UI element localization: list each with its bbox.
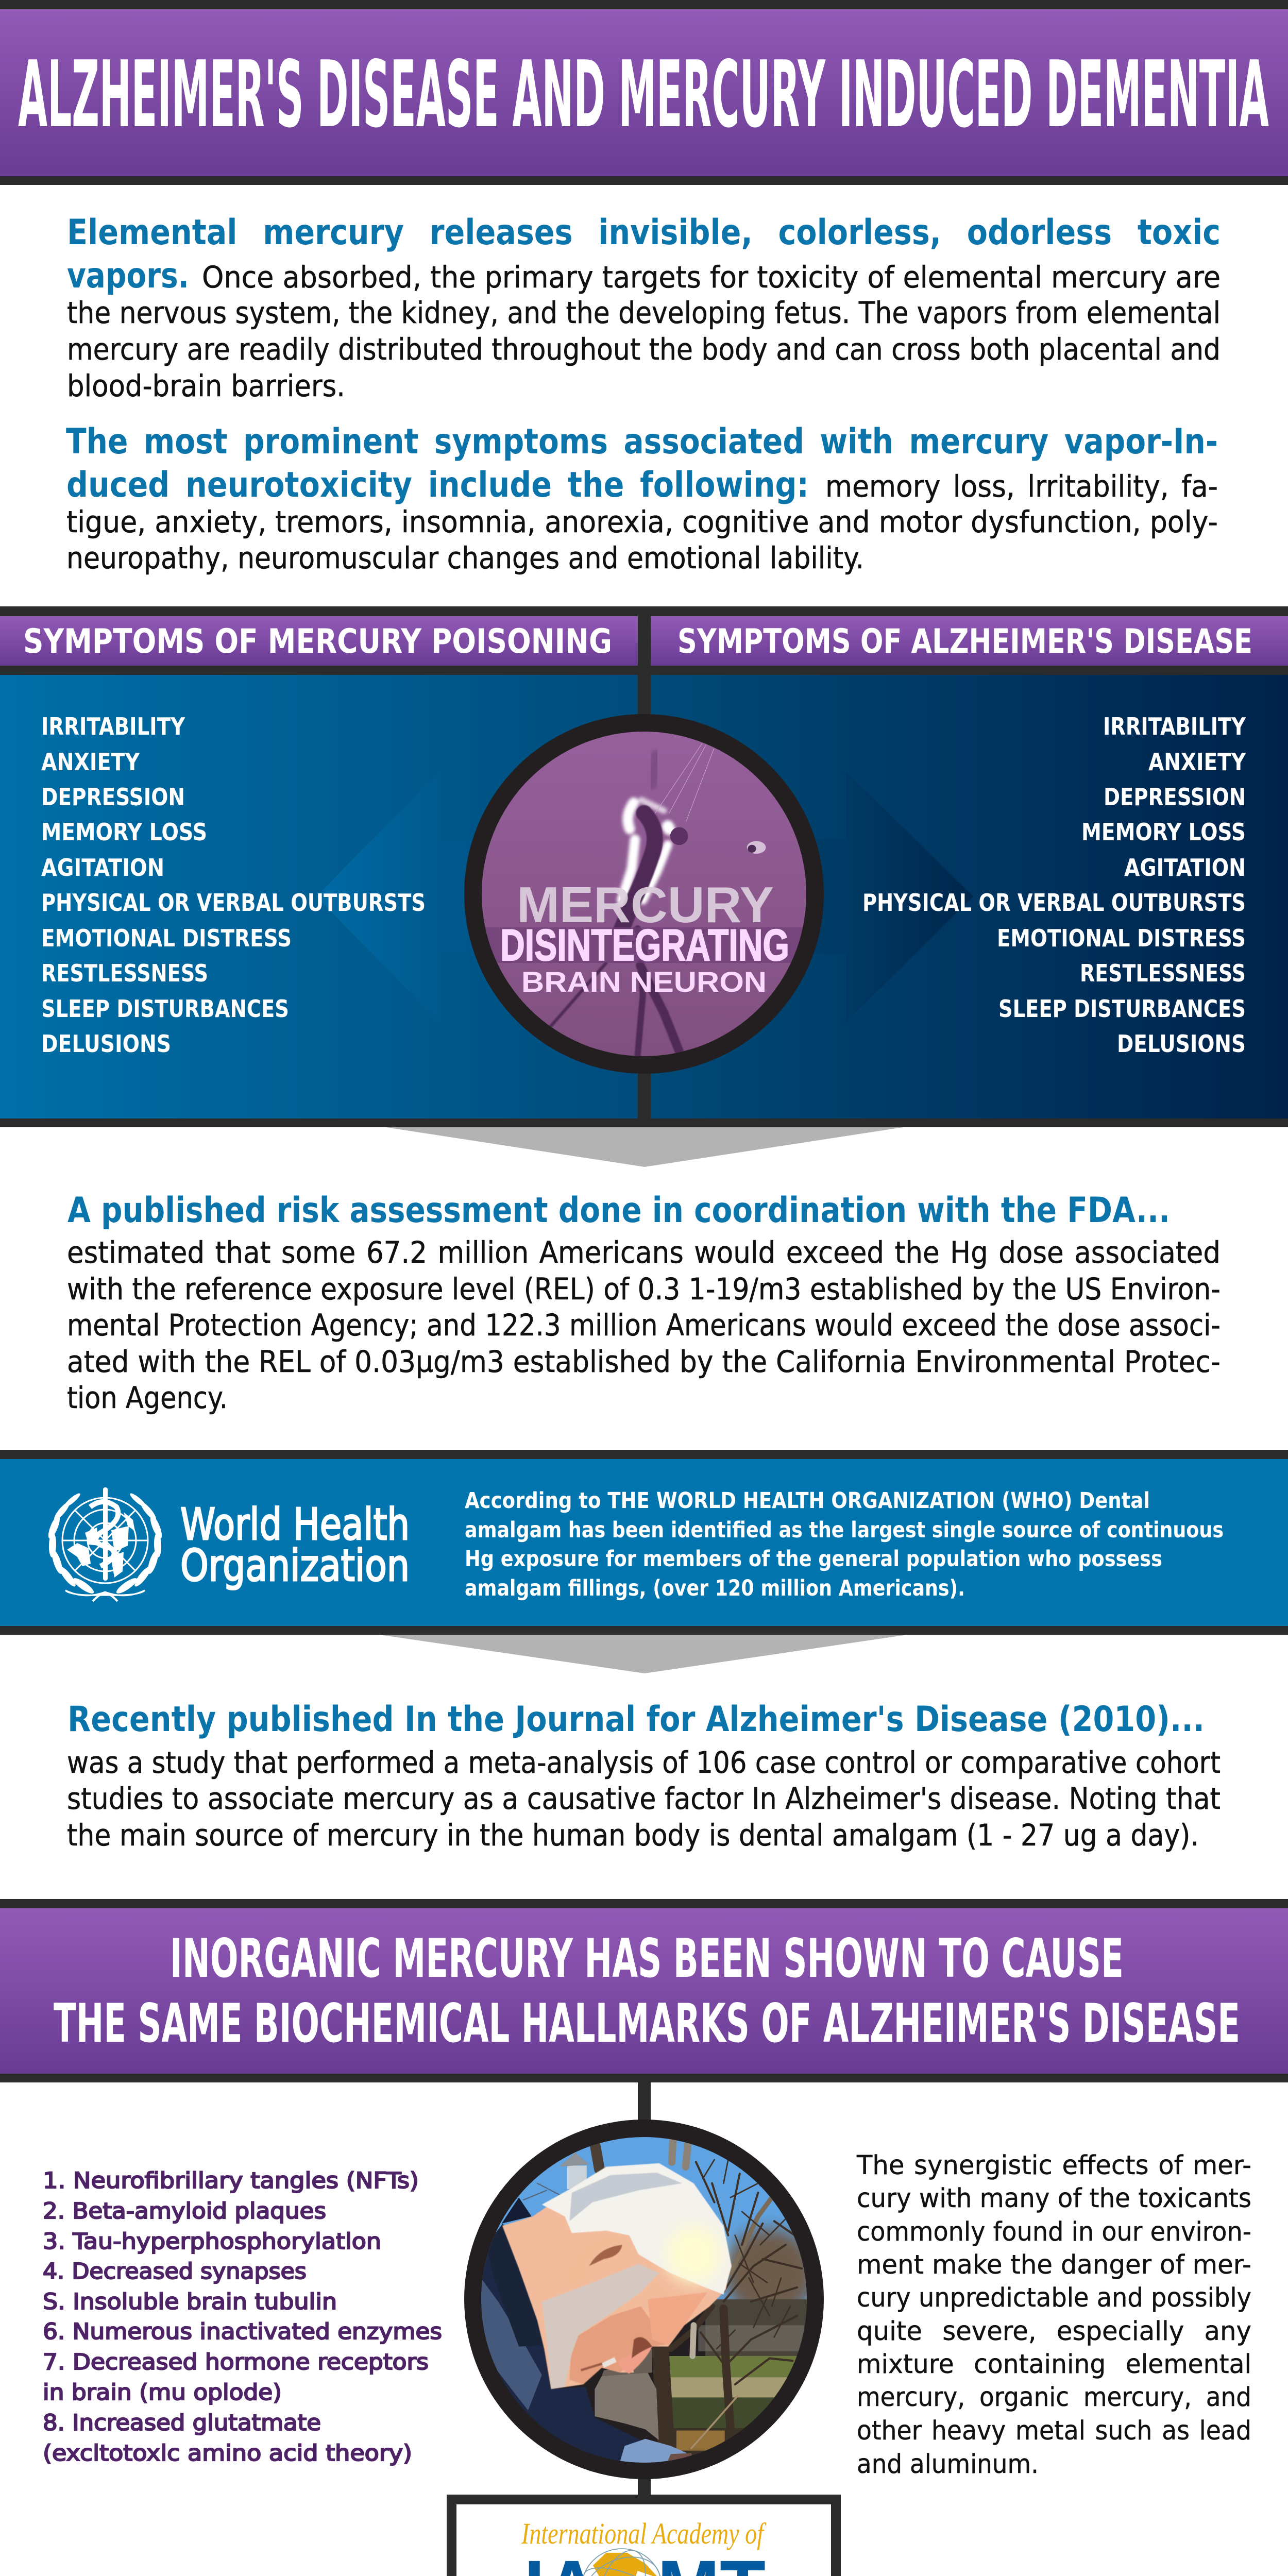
list: alzheimer's symptoms: ANXIETY — [1148, 748, 1246, 776]
WHO statement: According to THE WORLD HEALTH ORGANIZATION (WHO) Dental — [465, 1488, 1150, 1514]
list: biochemical hallmarks: 3. Tau-hyperphosphorylatlon — [43, 2229, 381, 2255]
intro text block: prominent symptoms: duced neurotoxicity include the following: — [66, 465, 809, 505]
text block: synergistic effects — [856, 2150, 1251, 2480]
WHO statement: amalgam fillings, (over 120 million Americans). — [465, 1575, 965, 1601]
WHO wordmark: World Health — [180, 1499, 410, 1550]
list: biochemical hallmarks: 1. Neurofibrillary tangles (NFTs) — [43, 2168, 419, 2194]
intro text block: elemental mercury — [67, 212, 1221, 403]
intro text block: elemental mercury: vapors. — [67, 256, 189, 296]
intro text block: prominent symptoms: tigue, anxiety, tremors, insomnia, anorexia, cognitive and motor dysfunction, poly- — [66, 504, 1218, 539]
list: biochemical hallmarks: S. Insoluble brain tubulin — [43, 2289, 337, 2315]
list: mercury poisoning symptoms: DEPRESSION — [41, 783, 185, 811]
icon: brain neuron circle — [464, 714, 824, 1074]
text block: synergistic effects: mercury, organic mercury, and — [857, 2382, 1251, 2413]
list: biochemical hallmarks — [43, 2168, 442, 2466]
list: biochemical hallmarks: (excltotoxlc amino acid theory) — [43, 2441, 412, 2466]
WHO statement: Hg exposure for members of the general population who possess — [465, 1546, 1162, 1572]
label: mercury: MERCURY — [517, 876, 774, 933]
list: mercury poisoning symptoms: MEMORY LOSS — [41, 818, 207, 846]
list: mercury poisoning symptoms: IRRITABILITY — [41, 713, 185, 740]
text block: synergistic effects: mixture containing elemental — [857, 2349, 1251, 2380]
icon: portrait circle — [464, 2120, 824, 2479]
intro text block: prominent symptoms: memory loss, lrritability, fa- — [825, 469, 1218, 504]
text block: synergistic effects: The synergistic effects of mer- — [856, 2150, 1251, 2181]
list: biochemical hallmarks: 2. Beta-amyloid plaques — [43, 2198, 326, 2224]
list: mercury poisoning symptoms: EMOTIONAL DISTRESS — [41, 924, 292, 952]
list: alzheimer's symptoms: IRRITABILITY — [1103, 713, 1246, 740]
list: mercury poisoning symptoms: AGITATION — [41, 854, 164, 882]
list: mercury poisoning symptoms: SLEEP DISTURBANCES — [41, 995, 289, 1023]
logo globe — [583, 2548, 660, 2576]
arrow: grey chevron one — [386, 1127, 903, 1167]
text block: synergistic effects: other heavy metal such as lead — [857, 2416, 1251, 2446]
text block: synergistic effects: quite severe, especially any — [857, 2316, 1251, 2347]
connector line — [638, 2082, 651, 2500]
list: mercury poisoning symptoms: RESTLESSNESS — [41, 959, 208, 987]
intro text block: elemental mercury: blood-brain barriers. — [67, 368, 345, 403]
WHO wordmark — [180, 1499, 410, 1591]
WHO wordmark: Organization — [180, 1540, 410, 1591]
logo text top: International Academy of — [521, 2517, 766, 2550]
arrow: right ghost arrow — [773, 771, 973, 1023]
banner: biochemical hallmarks — [0, 1899, 1288, 2082]
text block: synergistic effects: ment make the danger of mer- — [857, 2250, 1251, 2280]
list: alzheimer's symptoms: AGITATION — [1124, 854, 1246, 882]
list: mercury poisoning symptoms: PHYSICAL OR VERBAL OUTBURSTS — [41, 889, 426, 917]
heading: symptoms of mercury poisoning: SYMPTOMS OF MERCURY POISONING — [23, 622, 612, 661]
IAOMT logo box — [447, 2495, 841, 2576]
list: biochemical hallmarks: 4. Decreased synapses — [43, 2259, 307, 2284]
text block: FDA risk assessment: ated with the REL of 0.03µg/m3 established by the California Environmental Protec- — [67, 1344, 1221, 1379]
intro text block: elemental mercury: Once absorbed, the primary targets for toxicity of elemental mercury are — [202, 260, 1221, 295]
list: biochemical hallmarks: in brain (mu oplode) — [43, 2380, 282, 2405]
arrow: left ghost arrow — [316, 771, 515, 1023]
list: mercury poisoning symptoms: ANXIETY — [41, 748, 140, 776]
list: alzheimer's symptoms — [862, 713, 1246, 1058]
list: alzheimer's symptoms: DELUSIONS — [1117, 1030, 1246, 1058]
text block: synergistic effects: cury unpredictable and possibly — [857, 2283, 1251, 2313]
text block: synergistic effects: cury with many of the toxicants — [857, 2183, 1251, 2214]
list: alzheimer's symptoms: RESTLESSNESS — [1080, 959, 1246, 987]
list: alzheimer's symptoms: EMOTIONAL DISTRESS — [997, 924, 1246, 952]
intro text block: prominent symptoms: neuropathy, neuromuscular changes and emotional lability. — [66, 540, 864, 575]
list: alzheimer's symptoms: DEPRESSION — [1104, 783, 1246, 811]
panel: world health organization — [0, 1450, 1288, 1635]
intro text block: prominent symptoms — [66, 421, 1218, 575]
panel: symptoms comparison — [0, 606, 1288, 1127]
arrow: grey chevron two — [379, 1635, 907, 1673]
label: disintegrating: DISINTEGRATING — [500, 921, 789, 970]
label: brain neuron: BRAIN NEURON — [521, 965, 767, 998]
list: mercury poisoning symptoms: DELUSIONS — [41, 1030, 171, 1058]
icon: WHO emblem — [46, 1487, 164, 1601]
list: alzheimer's symptoms: SLEEP DISTURBANCES — [998, 995, 1246, 1023]
text block: journal for alzheimer's disease — [67, 1699, 1221, 1853]
list: biochemical hallmarks: 6. Numerous inactivated enzymes — [43, 2319, 442, 2345]
title banner — [0, 0, 1288, 185]
list: alzheimer's symptoms: MEMORY LOSS — [1081, 818, 1246, 846]
list: biochemical hallmarks: 8. Increased glutatmate — [43, 2410, 321, 2436]
text block: FDA risk assessment — [67, 1190, 1221, 1415]
text block: synergistic effects: and aluminum. — [857, 2449, 1039, 2480]
list: mercury poisoning symptoms — [41, 713, 426, 1058]
list: biochemical hallmarks: 7. Decreased hormone receptors — [43, 2349, 429, 2375]
text block: synergistic effects: commonly found in our environ- — [857, 2217, 1251, 2247]
text block: FDA risk assessment: tion Agency. — [67, 1380, 228, 1415]
WHO statement — [465, 1488, 1224, 1601]
